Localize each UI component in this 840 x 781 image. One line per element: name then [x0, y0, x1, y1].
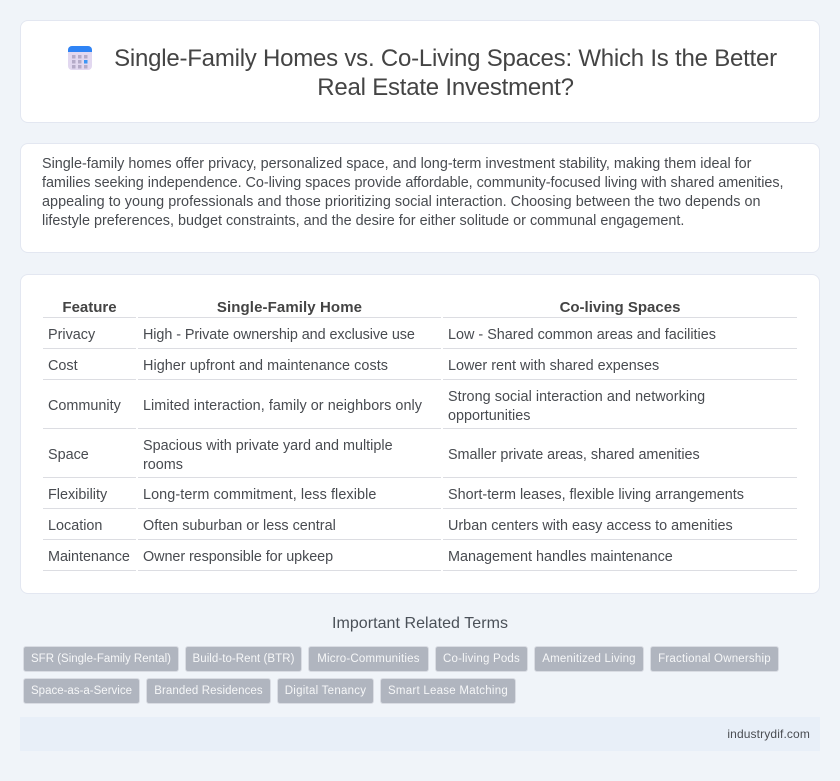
- panel: title header: [20, 20, 820, 123]
- footer band: [20, 717, 820, 751]
- row: cost: Lower rent with shared expenses: [448, 358, 659, 374]
- tag: [146, 678, 271, 704]
- intro text: appealing to young professionals and those prioritizing social interaction. Choosing between the two depends on: [42, 194, 761, 210]
- tag: SFR (Single-Family Rental): [31, 653, 171, 665]
- table header: [62, 299, 680, 316]
- row: maintenance: Owner responsible for upkeep: [143, 549, 333, 565]
- row: maintenance: [48, 549, 673, 565]
- row: community: opportunities: [448, 408, 530, 424]
- row: privacy: High - Private ownership and exclusive use: [143, 327, 415, 343]
- panel: comparison table: [20, 274, 820, 594]
- tag: Space-as-a-Service: [31, 685, 132, 697]
- tag: Fractional Ownership: [658, 653, 771, 665]
- row: flexibility: Short-term leases, flexible living arrangements: [448, 487, 744, 503]
- row: flexibility: Long-term commitment, less flexible: [143, 487, 376, 503]
- intro text: [42, 156, 783, 229]
- row: privacy: Privacy: [48, 327, 95, 343]
- row: privacy: Low - Shared common areas and facilities: [448, 327, 716, 343]
- row: flexibility: Flexibility: [48, 487, 107, 503]
- row: location: Often suburban or less central: [143, 518, 336, 534]
- tag: [23, 646, 179, 672]
- title: [114, 45, 777, 101]
- intro text: lifestyle preferences, budget constraints, and the desire for either solitude or communal engagement.: [42, 213, 684, 229]
- row: maintenance: Management handles maintenance: [448, 549, 673, 565]
- tag: Digital Tenancy: [285, 685, 366, 697]
- tag: [650, 646, 779, 672]
- tag: [23, 678, 140, 704]
- row: location: [48, 518, 733, 534]
- tag: Smart Lease Matching: [388, 685, 508, 697]
- row: privacy: [48, 327, 716, 343]
- row: space: Smaller private areas, shared amenities: [448, 447, 700, 463]
- intro text: Single-family homes offer privacy, personalized space, and long-term investment stability, making them ideal for: [42, 156, 751, 172]
- tag: Co-living Pods: [443, 653, 520, 665]
- row: location: Urban centers with easy access to amenities: [448, 518, 733, 534]
- row: community: [48, 389, 705, 424]
- tag: [534, 646, 644, 672]
- tag: [277, 678, 374, 704]
- title: Single-Family Homes vs. Co-Living Spaces: Which Is the Better: [114, 45, 777, 72]
- tag: [380, 678, 516, 704]
- row: space: Spacious with private yard and multiple: [143, 438, 393, 454]
- icon: calendar: [68, 46, 92, 70]
- tag: Build-to-Rent (BTR): [193, 653, 294, 665]
- related terms tags: [23, 646, 779, 704]
- table header: Co-living Spaces: [560, 299, 680, 316]
- row: community: Strong social interaction and networking: [448, 389, 705, 405]
- heading: related terms: Important Related Terms: [332, 615, 508, 632]
- footer source text: industrydif.com: [727, 727, 810, 741]
- tag: Amenitized Living: [542, 653, 636, 665]
- intro text: families seeking independence. Co-living spaces provide affordable, community-focused living with shared amenities,: [42, 175, 783, 191]
- panel: introduction: [20, 143, 820, 253]
- row: space: rooms: [143, 457, 183, 473]
- tag: [435, 646, 528, 672]
- row: community: Limited interaction, family or neighbors only: [143, 398, 422, 414]
- tag: Micro-Communities: [317, 653, 420, 665]
- row: space: [48, 438, 700, 473]
- tag: [185, 646, 302, 672]
- row: location: Location: [48, 518, 102, 534]
- row: community: Community: [48, 398, 121, 414]
- table header: Single-Family Home: [217, 299, 362, 316]
- tag: [308, 646, 429, 672]
- table header: Feature: [62, 299, 117, 316]
- row: flexibility: [48, 487, 744, 503]
- title: Real Estate Investment?: [317, 74, 574, 101]
- row: space: Space: [48, 447, 89, 463]
- row: cost: Higher upfront and maintenance costs: [143, 358, 388, 374]
- tag: Branded Residences: [154, 685, 263, 697]
- comparison table: [43, 299, 797, 571]
- row: cost: Cost: [48, 358, 78, 374]
- row: cost: [48, 358, 659, 374]
- row: maintenance: Maintenance: [48, 549, 130, 565]
